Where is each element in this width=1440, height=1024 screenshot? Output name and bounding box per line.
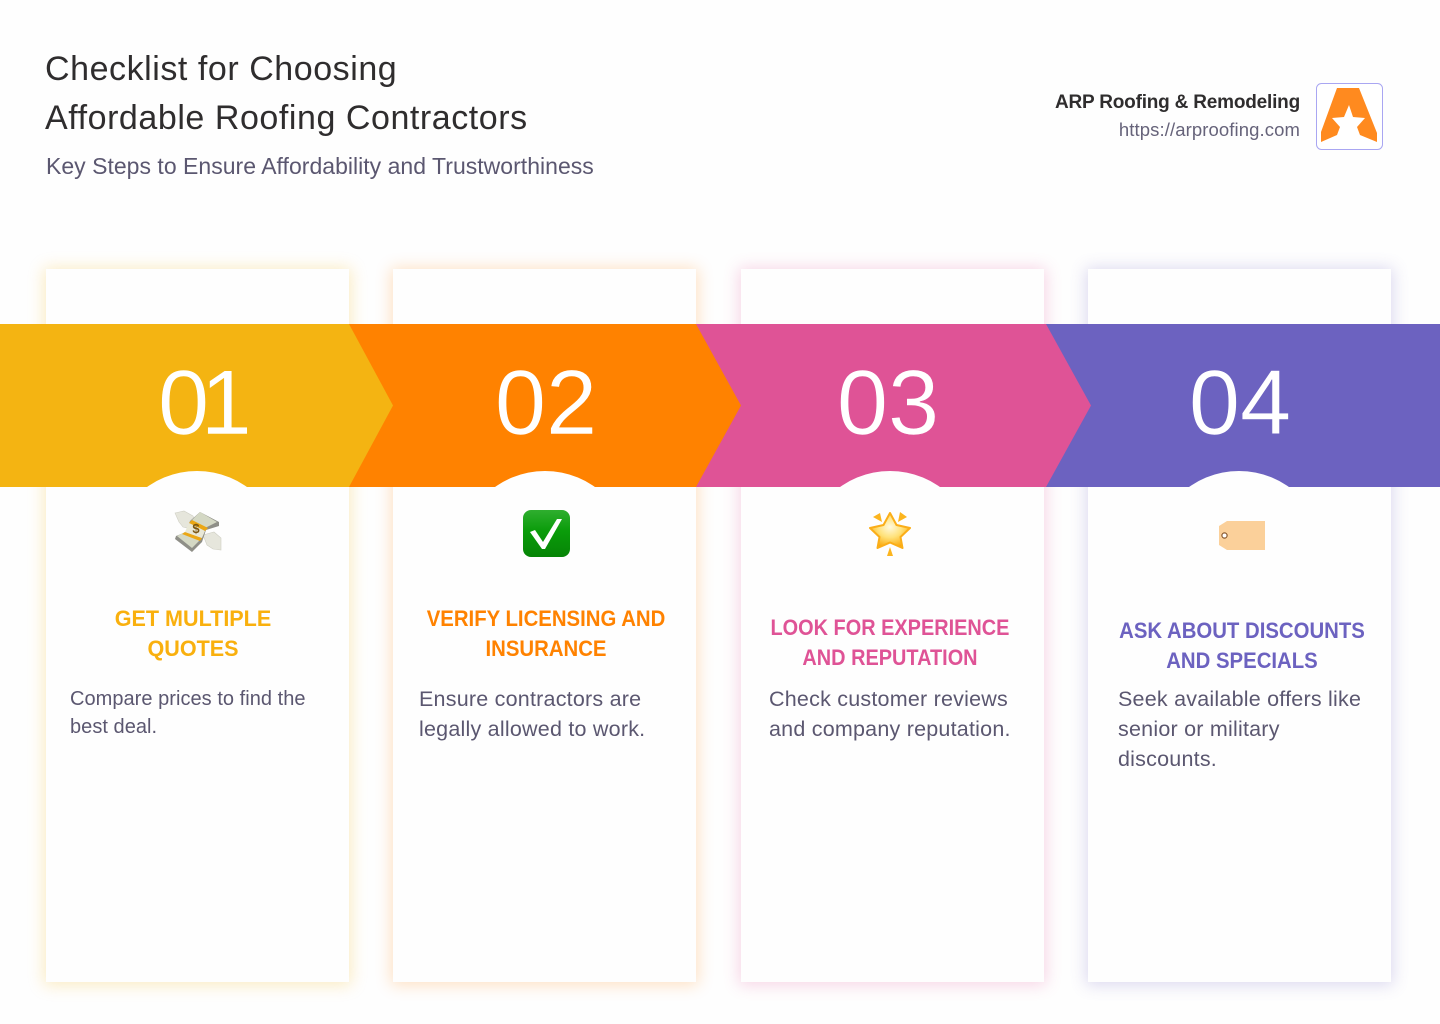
- heading 4: [1119, 618, 1365, 673]
- heading 2: INSURANCE: [485, 636, 606, 661]
- body 3: Check customer reviews: [769, 687, 1008, 711]
- heading 3: [771, 615, 1009, 670]
- arrow band: [0, 324, 1440, 487]
- heading 1: QUOTES: [147, 636, 239, 661]
- heading 4: ASK ABOUT DISCOUNTS: [1119, 618, 1365, 643]
- card 4: [1088, 269, 1391, 982]
- icon: price tag: [1219, 521, 1265, 550]
- heading 1: [115, 606, 271, 661]
- step numbers: [158, 352, 1291, 454]
- number 02: 02: [495, 352, 597, 454]
- card 1: [46, 269, 349, 982]
- number 04: 04: [1189, 352, 1291, 454]
- body 4: Seek available offers like: [1118, 687, 1361, 711]
- step 4 text: [1118, 618, 1365, 771]
- title: Checklist for Choosing: [45, 50, 397, 88]
- body 3: [769, 687, 1011, 741]
- step 2 text: [419, 606, 665, 741]
- arrow 3: [696, 324, 1091, 487]
- heading 3: AND REPUTATION: [802, 645, 978, 670]
- icon: green check: [523, 510, 570, 557]
- body 4: [1118, 687, 1361, 771]
- body 2: [419, 687, 645, 741]
- heading 2: [426, 606, 665, 661]
- number 03: 03: [837, 352, 939, 454]
- heading 2: VERIFY LICENSING AND: [427, 606, 665, 631]
- heading 3: LOOK FOR EXPERIENCE: [771, 615, 1009, 640]
- step 3 text: [769, 615, 1011, 741]
- icon: money with wings: [174, 510, 222, 552]
- heading 1: GET MULTIPLE: [115, 606, 271, 631]
- body 1: best deal.: [70, 716, 157, 738]
- body 1: [70, 688, 306, 738]
- icon: brand logo: [1316, 83, 1383, 150]
- body 1: Compare prices to find the: [70, 688, 306, 710]
- body 4: discounts.: [1118, 747, 1217, 771]
- body 2: legally allowed to work.: [419, 717, 645, 741]
- number 01: 01: [158, 352, 243, 454]
- body 2: Ensure contractors are: [419, 687, 641, 711]
- card 2: [393, 269, 696, 982]
- white arcs: [111, 471, 1325, 643]
- arrow 2: [349, 324, 741, 487]
- brand name: ARP Roofing & Remodeling: [1055, 92, 1300, 113]
- heading 4: AND SPECIALS: [1166, 648, 1318, 673]
- icon: glowing star: [868, 512, 911, 556]
- icon: money with wings: $: [192, 521, 200, 536]
- subtitle: Key Steps to Ensure Affordability and Trustworthiness: [46, 153, 594, 179]
- card 3: [741, 269, 1044, 982]
- arrow 4: [1046, 324, 1440, 487]
- title: Affordable Roofing Contractors: [45, 99, 528, 137]
- body 3: and company reputation.: [769, 717, 1011, 741]
- brand url: https://arproofing.com: [1119, 119, 1300, 140]
- arrow 1: [0, 324, 393, 487]
- step 1 text: [70, 606, 306, 738]
- title: [45, 50, 528, 137]
- body 4: senior or military: [1118, 717, 1280, 741]
